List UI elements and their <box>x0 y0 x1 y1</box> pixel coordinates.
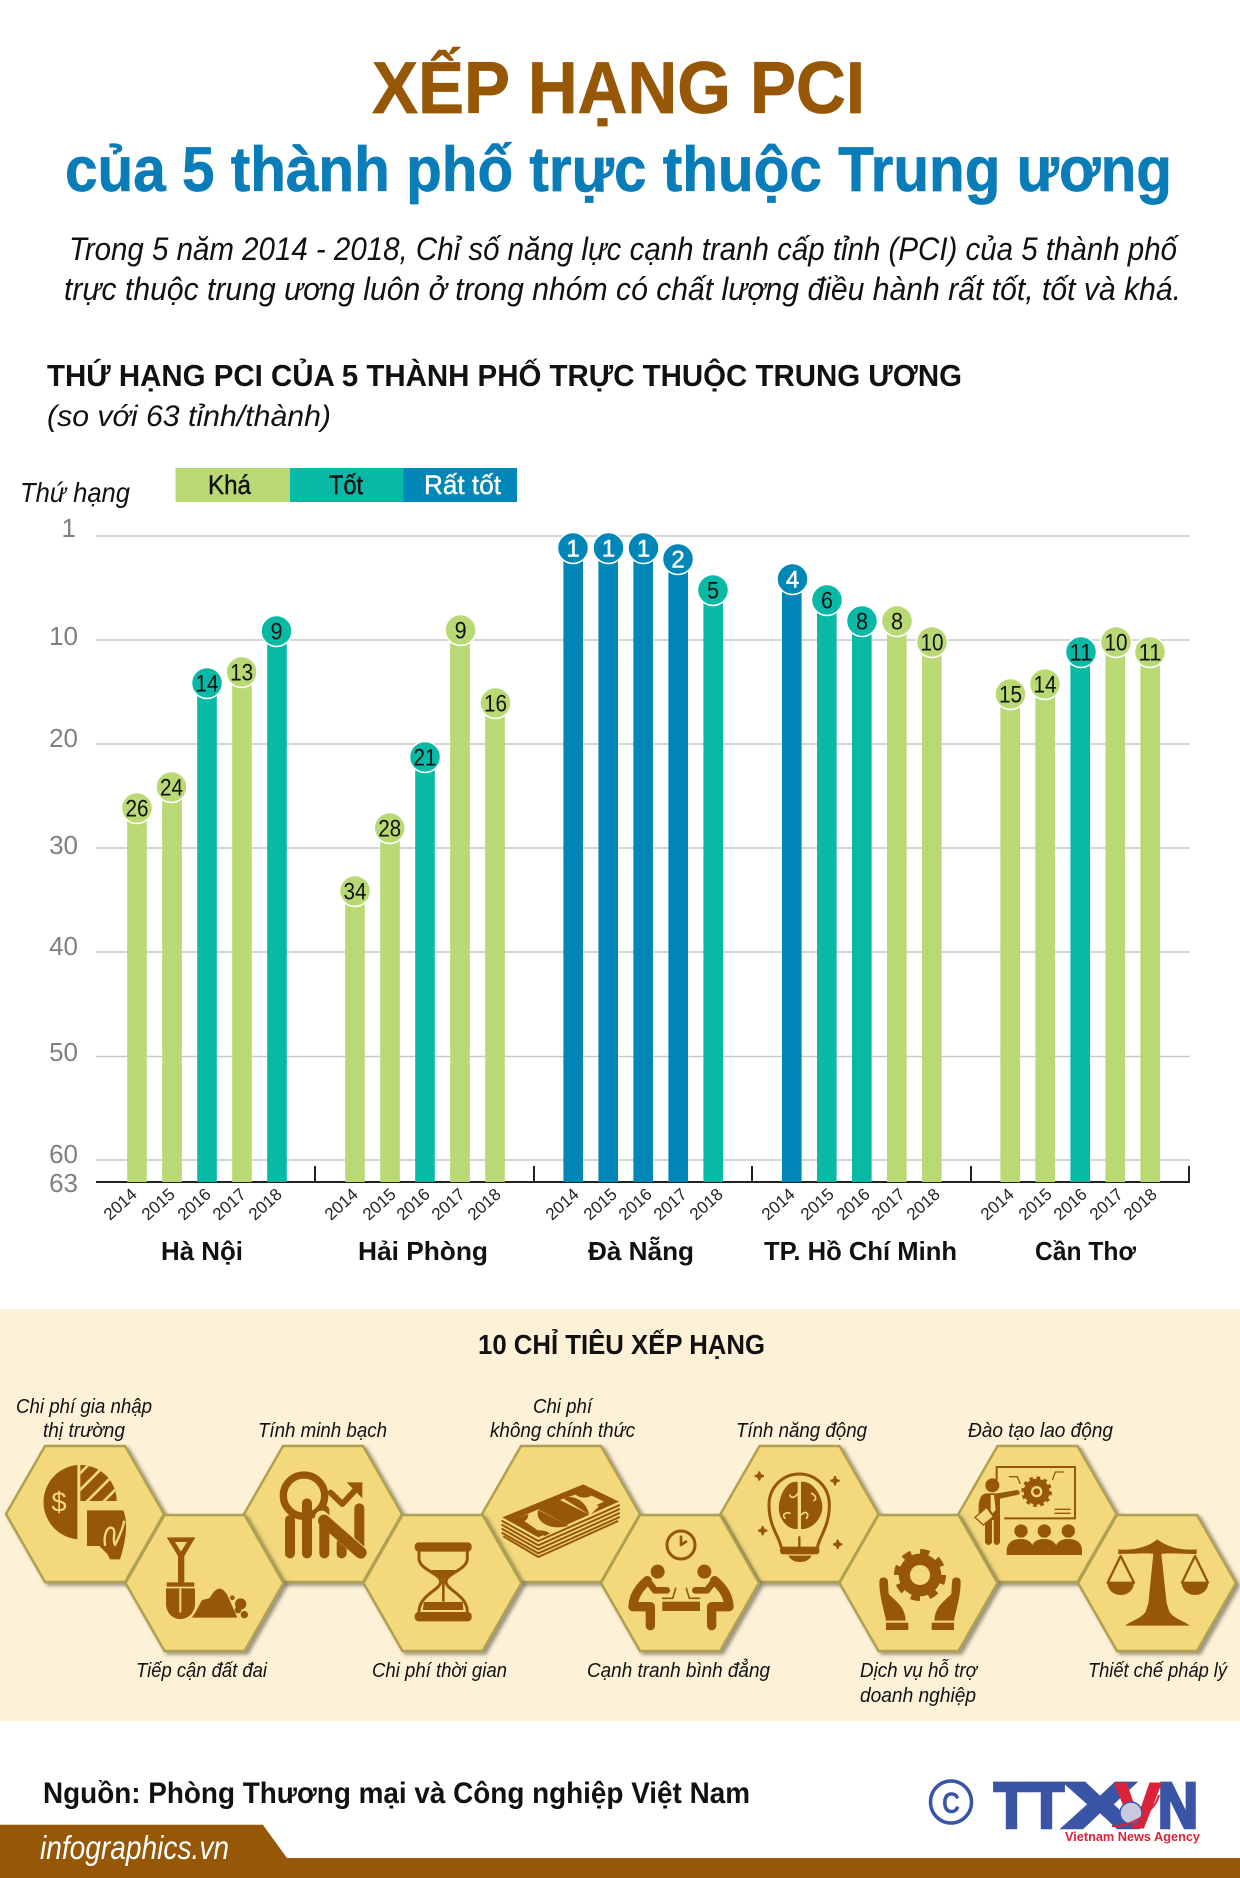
group: Hà Nội <box>122 616 292 1182</box>
group: TP. Hồ Chí Minh: 8 <box>856 608 868 636</box>
city names: TP. Hồ Chí Minh <box>764 1236 957 1266</box>
year labels: 2016 <box>1050 1185 1091 1224</box>
axis labels: 1 <box>62 513 76 543</box>
group: Hà Nội: 24 <box>160 774 183 802</box>
group: TP. Hồ Chí Minh: 8 <box>891 608 903 636</box>
source: Nguồn: Phòng Thương mại và Công nghiệp Việt Nam <box>43 1777 750 1810</box>
axis labels: 30 <box>49 830 78 860</box>
icon: stack of banknotes <box>502 1484 619 1557</box>
year labels: 2014 <box>977 1185 1018 1224</box>
icon: two people and clock <box>633 1531 729 1626</box>
icon: hourglass <box>415 1542 472 1621</box>
year labels: 2015 <box>797 1185 838 1224</box>
icon: trainer at board with audience <box>975 1467 1082 1555</box>
year labels: 2017 <box>868 1185 909 1224</box>
year labels: 2014 <box>542 1185 583 1224</box>
year labels: 2014 <box>758 1185 799 1224</box>
chart heading: THỨ HẠNG PCI CỦA 5 THÀNH PHỐ TRỰC THUỘC TRUNG ƯƠNG <box>47 357 962 393</box>
group: Cần Thơ: 11 <box>1138 640 1162 666</box>
year labels: 2015 <box>359 1185 400 1224</box>
subtitle: của 5 thành phố trực thuộc Trung ương <box>65 135 1172 205</box>
legend: Rất tốt <box>424 470 501 500</box>
year labels: 2016 <box>615 1185 656 1224</box>
year labels: 2015 <box>1015 1185 1056 1224</box>
year labels: 2016 <box>393 1185 434 1224</box>
logo: TTXVN: Vietnam News Agency <box>1065 1829 1201 1844</box>
legend: Khá <box>208 470 252 500</box>
axis labels: 10 <box>49 621 78 651</box>
group: Đà Nẵng: 1 <box>602 536 615 562</box>
group: Cần Thơ: 11 <box>1070 640 1092 666</box>
logo: TTXVN: V <box>1115 1770 1161 1842</box>
legend <box>176 468 517 502</box>
year labels <box>100 1185 1161 1224</box>
group: Hải Phòng: 16 <box>484 690 507 718</box>
icon: light bulb with brain <box>755 1471 842 1562</box>
intro text <box>64 231 1181 307</box>
group: Hải Phòng <box>340 614 511 1182</box>
group: Hải Phòng: 21 <box>414 744 436 772</box>
labels: criteria names: Tính năng động <box>736 1420 867 1442</box>
year labels: 2016 <box>174 1185 215 1224</box>
labels: criteria names: Chi phí thời gian <box>372 1660 507 1682</box>
year labels: 2015 <box>138 1185 179 1224</box>
group: Cần Thơ: 14 <box>1034 672 1056 698</box>
icon: gear held by hands <box>879 1552 961 1630</box>
year labels: 2018 <box>1120 1185 1161 1224</box>
chart: PCI rank bars <box>49 513 1190 1266</box>
footer bar <box>0 1824 1240 1878</box>
axis labels <box>49 513 78 1198</box>
year labels: 2017 <box>650 1185 691 1224</box>
axis line <box>96 1166 1190 1183</box>
labels: criteria names: Tiếp cận đất đai <box>136 1660 268 1682</box>
axis labels: 60 <box>49 1139 78 1169</box>
logo: TTXVN: C <box>942 1787 960 1820</box>
axis labels: 63 <box>49 1168 78 1198</box>
group: Hà Nội: 26 <box>126 796 148 822</box>
labels: criteria names: Tính minh bạch <box>258 1420 387 1442</box>
city names <box>161 1236 1136 1266</box>
year labels: 2018 <box>903 1185 944 1224</box>
intro text: trực thuộc trung ương luôn ở trong nhóm có chất lượng điều hành rất tốt, tốt và khá. <box>64 271 1181 307</box>
axis title: Thứ hạng <box>20 477 130 508</box>
icon: scales of justice <box>1107 1539 1208 1626</box>
group: Hà Nội: 13 <box>230 660 253 686</box>
group: TP. Hồ Chí Minh <box>777 564 948 1182</box>
icon: pie chart and hand <box>44 1458 127 1559</box>
logo: TTXVN: TT <box>994 1770 1064 1842</box>
year labels: 2014 <box>321 1185 362 1224</box>
group: Đà Nẵng: 1 <box>637 536 650 562</box>
year labels: 2018 <box>686 1185 727 1224</box>
labels: criteria names: Cạnh tranh bình đẳng <box>587 1659 770 1682</box>
group: Đà Nẵng <box>558 532 728 1182</box>
panel: 10 criteria <box>0 1309 1240 1721</box>
year labels: 2018 <box>464 1185 505 1224</box>
labels: criteria names: không chính thức <box>490 1420 635 1442</box>
year labels: 2018 <box>245 1185 286 1224</box>
group: Hải Phòng: 34 <box>344 878 366 906</box>
year labels: 2014 <box>100 1185 141 1224</box>
year labels: 2017 <box>209 1185 250 1224</box>
group: TP. Hồ Chí Minh: 10 <box>920 630 944 656</box>
year labels: 2016 <box>833 1185 874 1224</box>
chart subheading: (so với 63 tỉnh/thành) <box>47 400 331 433</box>
logo: TTXVN: X <box>1064 1770 1137 1842</box>
labels: criteria names: thị trường <box>43 1420 125 1442</box>
year labels: 2017 <box>1086 1185 1127 1224</box>
labels: criteria names: Đào tạo lao động <box>968 1420 1113 1442</box>
axis labels: 50 <box>49 1037 78 1067</box>
icon: shovel and soil <box>166 1537 248 1619</box>
intro text: Trong 5 năm 2014 - 2018, Chỉ số năng lực cạnh tranh cấp tỉnh (PCI) của 5 thành phố <box>69 231 1180 267</box>
labels: criteria names <box>16 1396 1228 1707</box>
labels: criteria names: doanh nghiệp <box>860 1685 976 1707</box>
legend: Tốt <box>329 470 363 500</box>
labels: criteria names: Thiết chế pháp lý <box>1088 1660 1228 1682</box>
logo: TTXVN <box>930 1770 1201 1844</box>
group: Cần Thơ: 15 <box>999 682 1022 708</box>
logo: TTXVN: N <box>1158 1770 1198 1842</box>
city names: Hải Phòng <box>358 1236 488 1266</box>
group: Hải Phòng: 9 <box>455 618 467 644</box>
city names: Đà Nẵng <box>588 1236 694 1266</box>
city names: Hà Nội <box>161 1236 243 1266</box>
group: Cần Thơ <box>995 626 1166 1182</box>
axis labels: 40 <box>49 931 78 961</box>
city names: Cần Thơ <box>1035 1236 1136 1266</box>
year labels: 2015 <box>580 1185 621 1224</box>
panel heading: 10 CHỈ TIÊU XẾP HẠNG <box>478 1328 765 1360</box>
title: XẾP HẠNG PCI <box>372 48 865 129</box>
labels: criteria names: Chi phí gia nhập <box>16 1396 152 1418</box>
group: Đà Nẵng: 2 <box>671 546 685 574</box>
group: TP. Hồ Chí Minh: 4 <box>786 566 799 594</box>
group: Hà Nội: 14 <box>196 670 218 698</box>
group: Đà Nẵng: 1 <box>566 536 580 562</box>
group: Hà Nội: 9 <box>270 618 282 646</box>
labels: criteria names: Dịch vụ hỗ trợ <box>860 1659 979 1682</box>
footer brand: infographics.vn <box>40 1829 229 1866</box>
hexagons <box>6 1446 1236 1651</box>
axis labels: 20 <box>49 723 78 753</box>
group: TP. Hồ Chí Minh: 6 <box>821 588 833 614</box>
icon: magnifier and growth chart <box>283 1475 362 1553</box>
group: Hải Phòng: 28 <box>378 816 401 842</box>
group: Đà Nẵng: 5 <box>707 578 719 604</box>
labels: criteria names: Chi phí <box>533 1396 594 1418</box>
year labels: 2017 <box>428 1185 469 1224</box>
icon: pie chart and hand: $ <box>51 1487 67 1518</box>
group: Cần Thơ: 10 <box>1104 630 1128 656</box>
